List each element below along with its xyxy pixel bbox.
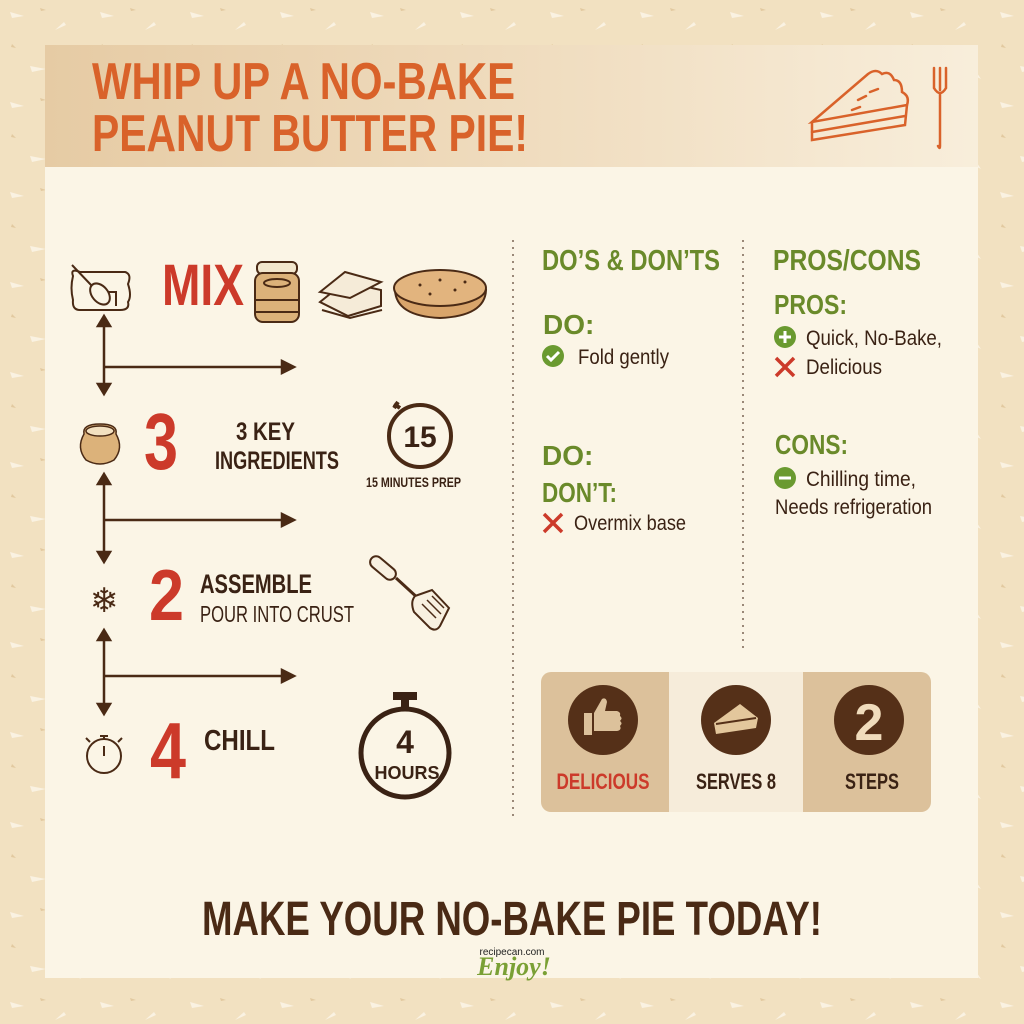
panel: stats box: [541, 672, 931, 812]
panel: do's and don'ts: DON’T:: [542, 477, 617, 508]
footer: signature: Enjoy!: [476, 952, 551, 981]
icon: small stopwatch: [86, 736, 122, 773]
step 2: [149, 556, 354, 636]
icon: peanut butter pot: [80, 424, 120, 464]
stat: 2 steps: 2: [855, 694, 883, 752]
stat: serves 8: SERVES 8: [696, 769, 776, 794]
stat: delicious: [556, 685, 650, 794]
icon: 15 min timer: 15: [403, 421, 437, 454]
title: PEANUT BUTTER PIE!: [92, 105, 528, 163]
panel: pros and cons: PROS:: [774, 289, 847, 320]
panel: pros and cons: Delicious: [806, 356, 882, 379]
title: WHIP UP A NO-BAKE: [92, 53, 515, 111]
panel: do's and don'ts: Overmix base: [574, 512, 686, 535]
header band: [45, 45, 978, 167]
stat: delicious: DELICIOUS: [556, 769, 650, 794]
icon: spatula: [368, 554, 449, 630]
icon: peanut butter jar: [255, 262, 299, 322]
panel: do's and don'ts: DO:: [542, 440, 593, 471]
panel: do's and don'ts: DO’S & DON’TS: [542, 245, 720, 277]
icon: cross: [544, 514, 562, 532]
step 3: 3: [144, 397, 178, 486]
stat: serves 8: [696, 685, 776, 794]
title: [92, 53, 528, 163]
icon: snowflake: ❄: [90, 581, 118, 621]
icon: 4 hours timer: HOURS: [374, 763, 440, 783]
step 3: [144, 397, 339, 486]
step 2: 2: [149, 556, 184, 636]
step 3: 3 KEY: [236, 418, 295, 446]
stat: 2 steps: [834, 685, 904, 794]
step 2: ASSEMBLE: [200, 569, 312, 599]
icon: 15 min timer: [366, 402, 461, 490]
heading: MIX: MIX: [162, 253, 244, 318]
panel: do's and don'ts: DO:: [543, 309, 594, 340]
icon: pie slice and fork: [812, 68, 946, 148]
icon: pie: [394, 270, 486, 318]
step 4: CHILL: [204, 725, 275, 757]
icon: 4 hours timer: 4: [396, 724, 414, 760]
icon: 15 min timer: 15 MINUTES PREP: [366, 474, 461, 490]
icon: check: [542, 345, 564, 367]
step 2: POUR INTO CRUST: [200, 601, 354, 627]
arrows: flow connectors: [98, 316, 294, 714]
step 4: 4: [150, 706, 186, 795]
step 4: [150, 706, 275, 795]
panel: pros and cons: PROS/CONS: [773, 245, 921, 277]
panel: do's and don'ts: [542, 245, 720, 535]
panel: pros and cons: Chilling time,: [806, 468, 916, 491]
call to action: MAKE YOUR NO-BAKE PIE TODAY!: [202, 893, 822, 946]
footer: signature: recipecan.com: [479, 947, 545, 958]
panel: pros and cons: Quick, No-Bake,: [806, 327, 942, 350]
step 3: INGREDIENTS: [215, 447, 339, 475]
panel: pros and cons: Needs refrigeration: [775, 496, 932, 519]
dividers: [513, 240, 743, 820]
icon: whisk in bowl: [72, 265, 130, 310]
panel: do's and don'ts: Fold gently: [578, 346, 669, 369]
stat: 2 steps: STEPS: [845, 769, 899, 794]
panel: pros and cons: CONS:: [775, 429, 848, 460]
panel: pros and cons: [773, 245, 942, 519]
icon: 4 hours timer: [361, 692, 449, 797]
icon: sandwich bar: [320, 272, 382, 318]
